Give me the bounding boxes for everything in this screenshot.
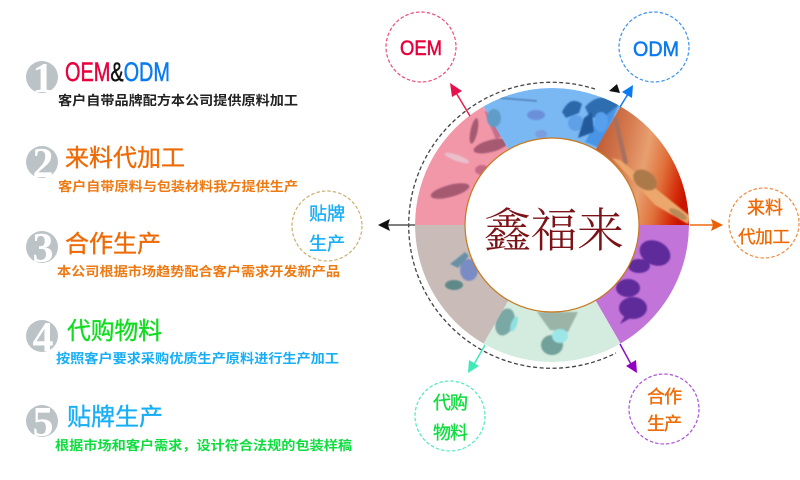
bubble: ODM: ODM [633,38,679,61]
bubble: 合作生产: 生产 [647,414,682,434]
number badge 2: 2 [32,141,54,187]
number badge 4 [26,315,58,361]
description 5: 根据市场和客户需求，设计符合法规的包装样稿 [55,438,352,453]
circular process diagram [409,82,690,368]
ring sector: orange [596,106,689,225]
ring sector: pink [415,106,508,225]
bubble: 合作生产: 合作 [647,387,682,407]
bubble: 代购物料 [415,381,485,451]
number badge 5 [26,400,58,446]
number badge 2 [26,141,58,187]
description 2: 客户自带原料与包装材料我方提供生产 [58,179,298,194]
ring sector: pale green [484,301,620,362]
dashed orbit arc with arrowhead [409,82,620,368]
list item 1: OEM & ODM [26,56,298,108]
bubble: 来料代加工: 代加工 [738,227,790,247]
heading: 来料代加工: 来料代加工 [65,145,185,172]
number badge 1 [26,56,58,102]
centre circle: 鑫福来: 鑫福来 [484,206,624,258]
heading: OEM&ODM: OEM&ODM [65,57,170,87]
number badge 3: 3 [32,226,54,272]
arrow: to 贴牌生产 [378,219,415,231]
arrow: to 代购物料 [468,345,485,373]
centre circle: 鑫福来 [465,138,639,312]
arrow: to ODM [620,85,633,107]
arrow: to OEM [450,83,470,116]
bubble: OEM [386,12,456,82]
ring sector: grey [415,225,508,344]
list item 2: 来料代加工 [26,141,298,194]
heading: 合作生产: 合作生产 [65,231,161,258]
arrow: to 合作生产 [620,344,637,373]
list item 3: 合作生产 [26,226,340,279]
bubble: ODM [619,12,689,82]
bubble: 贴牌生产 [292,191,362,261]
description 4: 按照客户要求采购优质生产原料进行生产加工 [56,351,339,366]
arrow: to 来料代加工 [690,219,723,231]
bubble: OEM: OEM [400,37,442,60]
bubble: 贴牌生产: 生产 [309,234,345,254]
number badge 1: 1 [32,56,54,102]
description 1: 客户自带品牌配方本公司提供原料加工 [58,93,298,108]
list item 4: 代购物料 [26,315,339,366]
number badge 4: 4 [32,315,54,361]
ring sector: blue [484,88,620,150]
bubble: 合作生产 [629,374,699,444]
list item 5: 贴牌生产 [26,400,352,453]
description 3: 本公司根据市场趋势配合客户需求开发新产品 [57,264,340,279]
heading: 贴牌生产: 贴牌生产 [67,404,163,431]
ring sector: purple [596,225,689,344]
number badge 3 [26,226,58,272]
bubble: 贴牌生产: 贴牌 [309,204,345,224]
bubble: 来料代加工 [729,188,799,258]
bubble: 代购物料: 代购 [433,393,468,413]
bubble: 代购物料: 物料 [433,423,468,443]
bubble: 来料代加工: 来料 [747,198,783,218]
heading: 代购物料: 代购物料 [67,318,162,345]
number badge 5: 5 [32,400,54,446]
